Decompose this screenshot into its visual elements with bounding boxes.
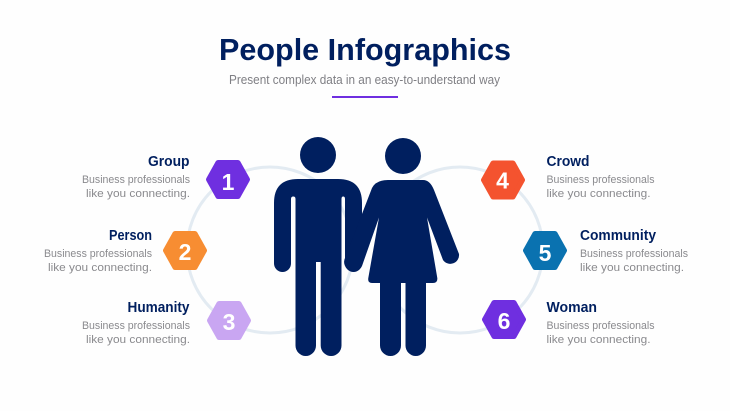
item 1: Group: like you connecting. — [86, 188, 190, 200]
subtitle: Present complex data in an easy-to-understand way — [229, 73, 501, 87]
item 6: Woman: Woman — [546, 300, 597, 316]
item 5: Community: Community — [580, 228, 656, 244]
item 1: Group — [82, 154, 248, 200]
item 5: Community — [526, 228, 688, 274]
item 1: Group: Group — [148, 154, 190, 170]
item 3: Humanity — [82, 300, 248, 346]
item 5: Community: Business professionals — [580, 248, 688, 260]
item 6: Woman: 6 — [498, 308, 510, 334]
item 6: Woman: like you connecting. — [546, 334, 650, 346]
connecting rings — [187, 167, 543, 333]
item 6: Woman: Business professionals — [546, 320, 655, 332]
item 2: Person: 2 — [179, 239, 191, 265]
item 5: Community: 5 — [539, 240, 552, 266]
item 6: Woman — [484, 300, 655, 346]
item 3: Humanity: 3 — [223, 309, 235, 335]
item 4: Crowd: 4 — [496, 168, 509, 194]
figure: man — [274, 137, 362, 356]
title accent line — [332, 96, 398, 98]
item 4: Crowd — [484, 154, 655, 200]
item 1: Group: 1 — [222, 169, 235, 195]
figure: woman — [344, 138, 459, 356]
item 4: Crowd: Business professionals — [546, 174, 655, 186]
item 2: Person: Business professionals — [44, 248, 152, 260]
item 2: Person: like you connecting. — [48, 262, 152, 274]
item 4: Crowd: Crowd — [546, 154, 590, 170]
item 1: Group: Business professionals — [82, 174, 190, 186]
item 3: Humanity: like you connecting. — [86, 334, 190, 346]
item 3: Humanity: Business professionals — [82, 320, 190, 332]
item 3: Humanity: Humanity — [128, 300, 190, 316]
item 4: Crowd: like you connecting. — [546, 188, 650, 200]
title: People Infographics — [219, 32, 511, 67]
item 2: Person: Person — [109, 228, 152, 244]
item 2: Person — [44, 228, 204, 274]
item 5: Community: like you connecting. — [580, 262, 684, 274]
